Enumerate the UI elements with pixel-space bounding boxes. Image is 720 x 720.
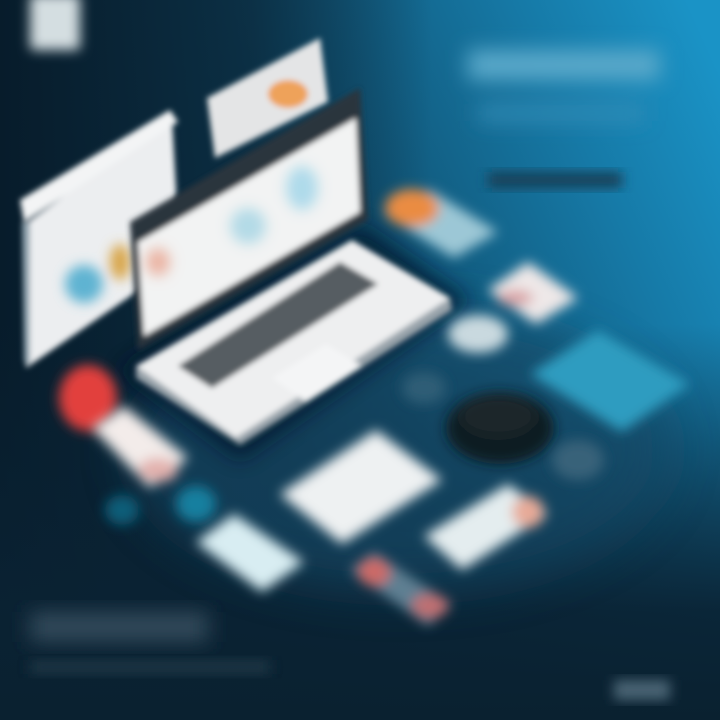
- bottom-left subheading: [30, 660, 270, 674]
- laptop screen: [130, 88, 368, 350]
- glow beneath the devices: [130, 310, 670, 590]
- orange and blue card: [384, 189, 498, 258]
- light blue card: [196, 514, 304, 592]
- top small panel: [207, 38, 328, 158]
- bottom-left heading block: [30, 612, 208, 642]
- left screen chart: [65, 244, 130, 303]
- top-right heading block: [468, 50, 660, 122]
- trackpad: [272, 344, 362, 402]
- teal dots: [105, 486, 216, 525]
- laptop shadow: [120, 225, 470, 460]
- large white card: [280, 430, 442, 544]
- bottom red-blue chip: [350, 552, 452, 626]
- small grey-blue chip: [552, 440, 604, 480]
- black device: [446, 392, 554, 464]
- red icon: [59, 365, 117, 431]
- bottom-right logo: [614, 680, 670, 700]
- small light chip: [448, 315, 508, 353]
- keyboard: [178, 262, 378, 388]
- right pale card: [424, 484, 548, 570]
- right white card: [488, 262, 578, 324]
- laptop base: [136, 240, 452, 445]
- top-left logo block: [30, 0, 80, 50]
- screen highlights: [146, 166, 318, 276]
- small dark-blue chip: [402, 372, 446, 404]
- teal card: [530, 330, 690, 432]
- white-red card: [92, 406, 188, 488]
- top-right dark label: [488, 172, 622, 188]
- left screen panel: [20, 110, 180, 368]
